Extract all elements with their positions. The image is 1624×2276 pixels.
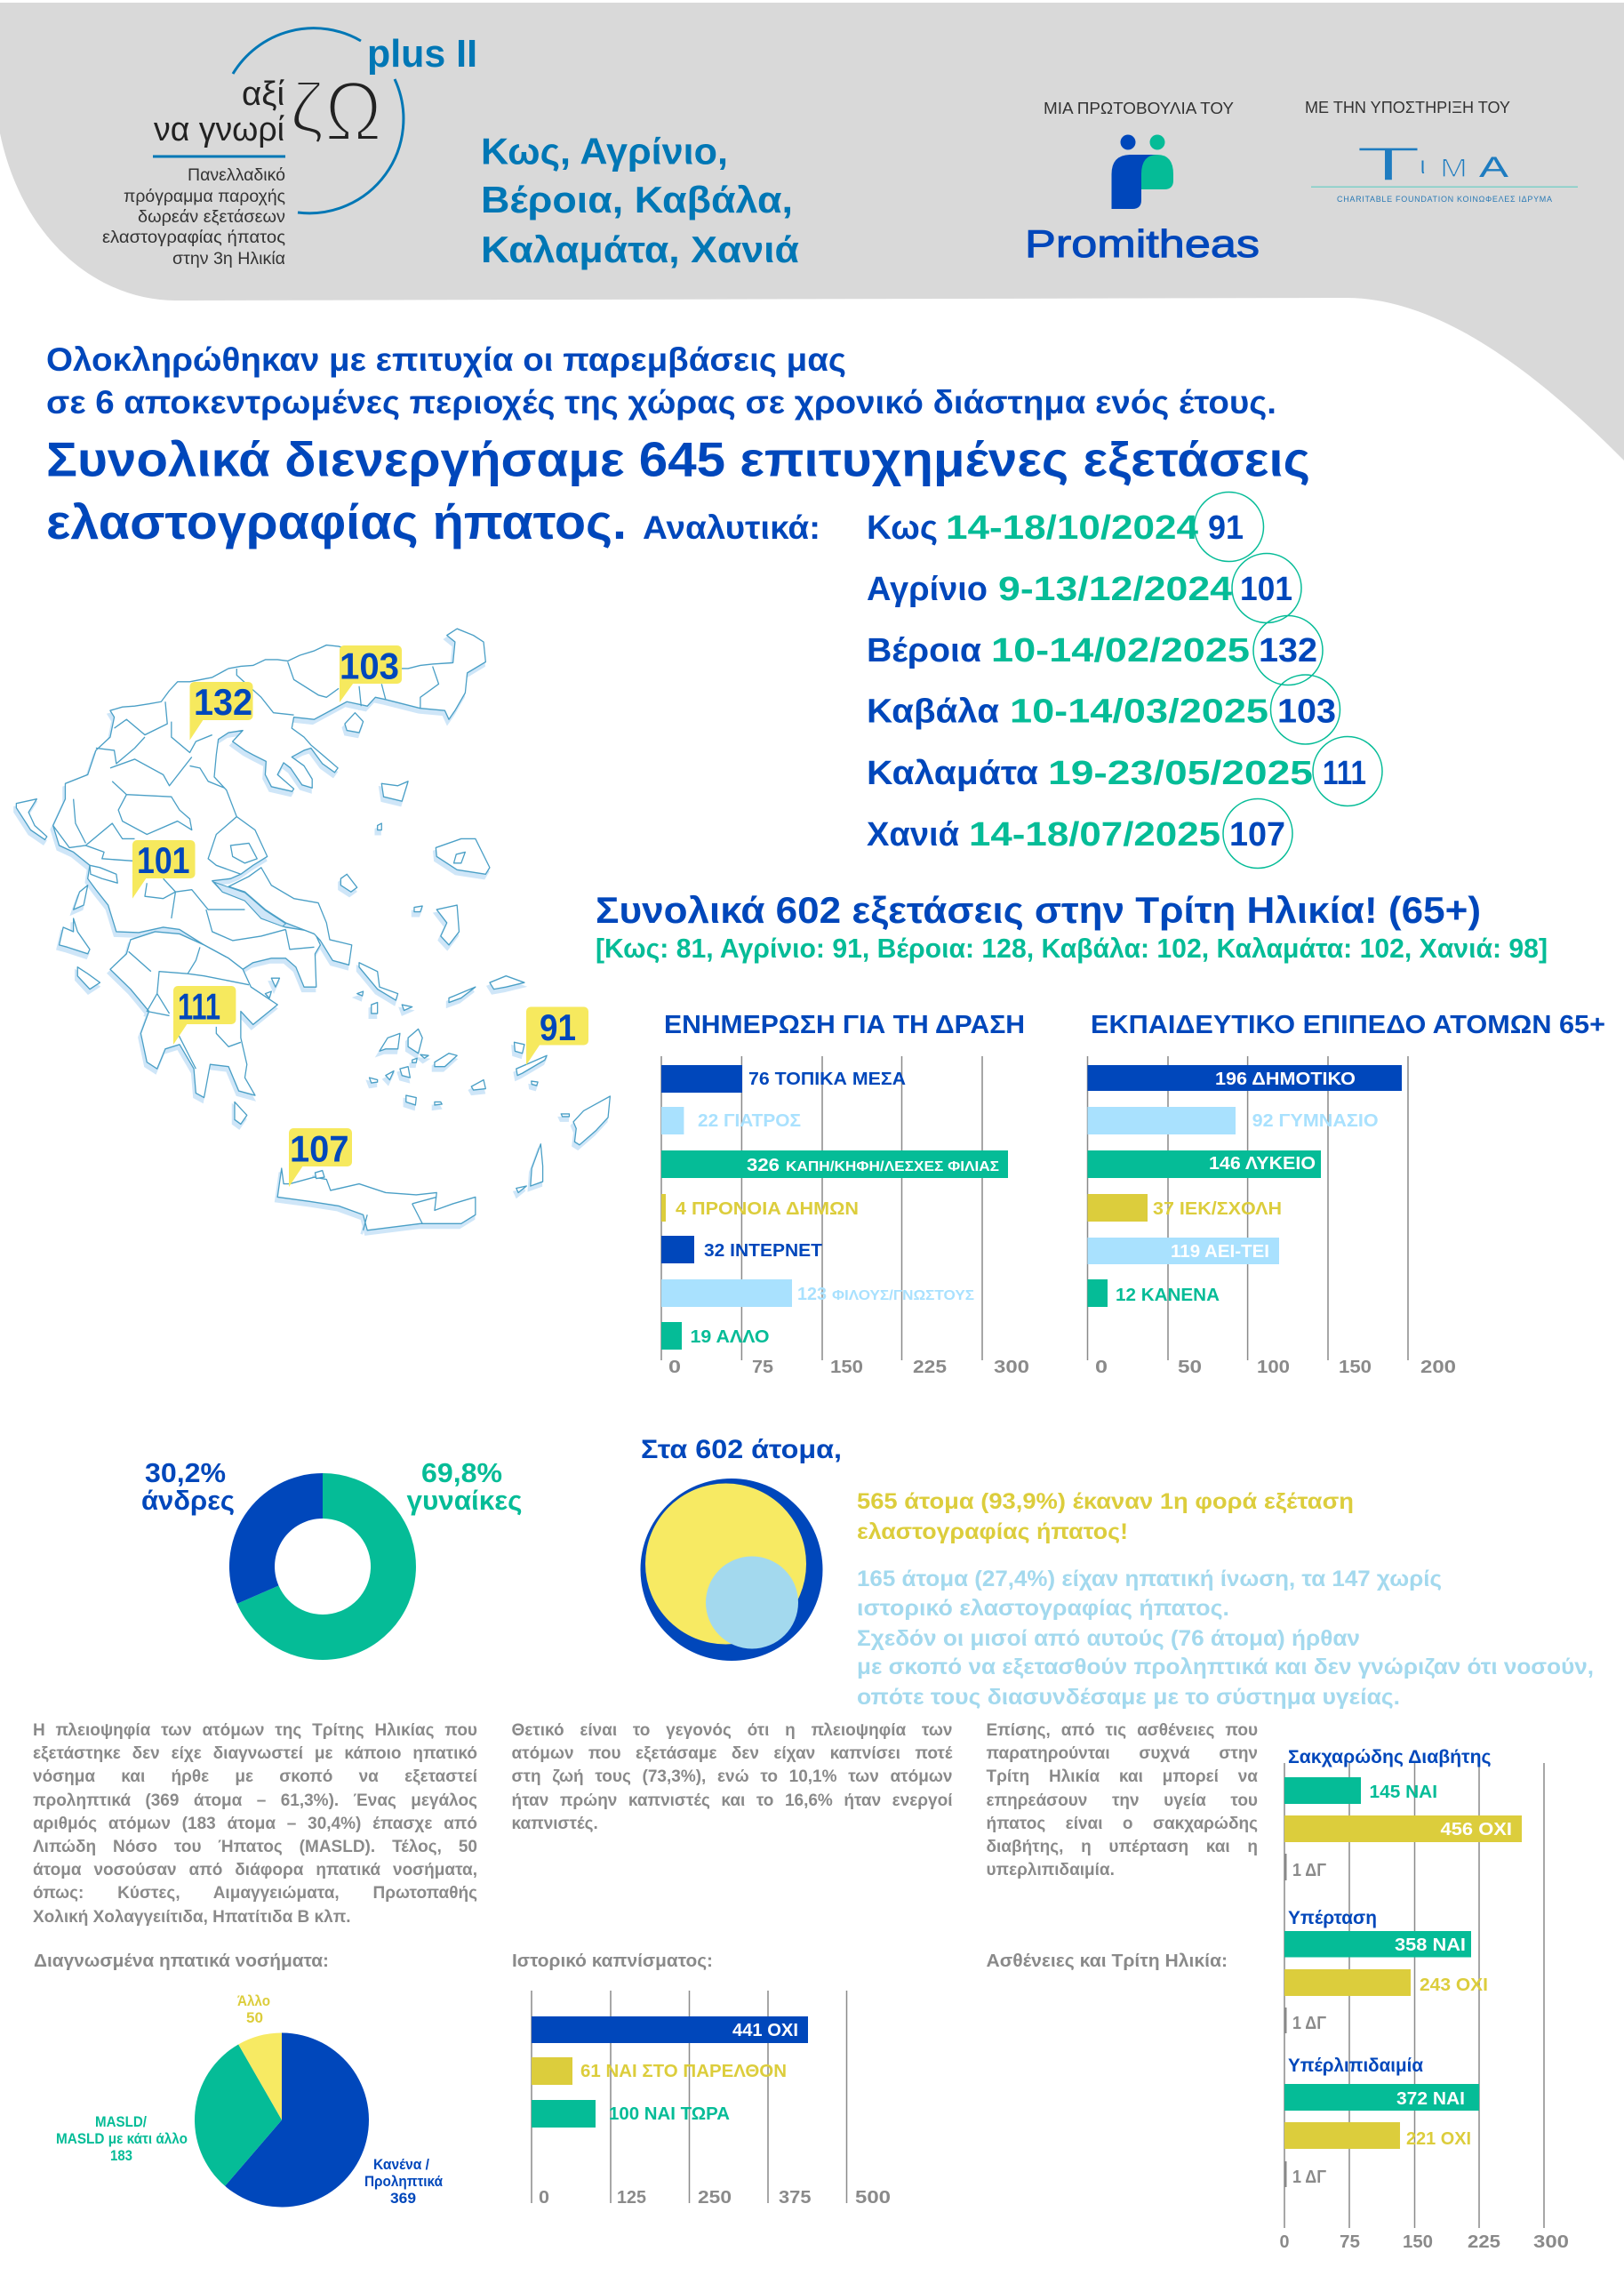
bar chart: awareness of the action: 326 (747, 1156, 780, 1175)
bar chart: education level: 100 (1257, 1358, 1290, 1377)
logo: αξί να γνωρίζω plus II: αξί (242, 76, 285, 113)
donut chart: gender: γυναίκες (407, 1485, 523, 1516)
group: hyperlipidemia: 372 ΝΑΙ (1396, 2089, 1465, 2109)
header cities (481, 130, 799, 270)
intro heading: σε 6 αποκεντρωμένες περιοχές της χώρας σε χρονικό διάστημα ενός έτους. (46, 384, 1276, 421)
main title: Συνολικά διενεργήσαμε 645 επιτυχημένες εξετάσεις (46, 432, 1310, 487)
row: Kalamata: Καλαμάτα (867, 755, 1038, 792)
bar chart: awareness of the action: 300 (994, 1358, 1029, 1377)
bar chart: awareness of the action: 22 ΓΙΑΤΡΟΣ (698, 1111, 801, 1131)
group: hyperlipidemia (1284, 2056, 1479, 2187)
text block: diseases summary: υπερλιπιδαιμία. (987, 1861, 1115, 1879)
row: Kalamata: 19-23/05/2025 (1048, 755, 1313, 792)
nested circles diagram (640, 1479, 823, 1661)
bar chart: smoking history (532, 1991, 891, 2208)
row: Kavala: Καβάλα (867, 693, 999, 731)
bar chart: awareness of the action: 19 ΑΛΛΟ (690, 1327, 770, 1347)
text block: smoking summary: καπνιστές. (512, 1815, 598, 1833)
text block: liver diagnosis summary: Λιπώδη Νόσο του Ήπατος (MASLD). Τέλος, 50 (33, 1838, 477, 1856)
header cities: Καλαμάτα, Χανιά (481, 228, 799, 270)
group: hypertension: 243 ΟΧΙ (1420, 1975, 1488, 1995)
row: Veria: 10-14/02/2025 (991, 632, 1250, 669)
text block: diseases summary: επηρεάσουν την υγεία του (987, 1791, 1258, 1810)
bar chart: smoking history: 100 ΝΑΙ ΤΩΡΑ (609, 2104, 730, 2124)
callout: Agrinio 101: 101 (137, 839, 190, 881)
callout text: first-time exam: ελαστογραφίας ήπατος! (857, 1519, 1128, 1544)
logo: Promitheas (1025, 100, 1260, 266)
text block: liver diagnosis summary: όπως: Κύστες, Αιμαγγειώματα, Πρωτοπαθής (33, 1884, 477, 1903)
row: Kos: Κως (867, 509, 938, 547)
bar chart: smoking history: 375 (779, 2188, 811, 2208)
group: diabetes (1284, 1747, 1522, 1880)
donut chart: gender (141, 1457, 523, 1660)
row: Chania (867, 798, 1292, 868)
row: Agrinio (867, 553, 1301, 622)
pie chart: diagnosed liver diseases: MASLD/ (95, 2113, 147, 2130)
text block: liver diagnosis summary: εξετάστηκε δεν είχε διαγνωστεί με κάποιο ηπατικό (33, 1744, 477, 1763)
bar chart: education level: 119 ΑΕΙ-ΤΕΙ (1171, 1242, 1269, 1262)
map of Greece with callouts (15, 629, 610, 1234)
group: diabetes: Σακχαρώδης Διαβήτης (1288, 1747, 1492, 1767)
row: Veria: 132 (1259, 632, 1317, 669)
bar chart: awareness of the action: 32 ΙΝΤΕΡΝΕΤ (704, 1241, 822, 1261)
callout: Agrinio 101 (132, 839, 196, 899)
donut chart: gender: 30,2% (145, 1457, 226, 1488)
bar chart: education level: 12 ΚΑΝΕΝΑ (1116, 1286, 1220, 1305)
intervention list (867, 493, 1382, 868)
text block: diseases summary: Επίσης, από τις ασθένειες που (987, 1721, 1258, 1740)
sub-heading: breakdown by city: [Κως: 81, Αγρίνιο: 91, Βέροια: 128, Καβάλα: 102, Καλαμάτα: 102, Χανιά: 98] (596, 933, 1548, 964)
group: diabetes: 1 ΔΓ (1292, 1861, 1326, 1880)
text block: liver diagnosis summary (33, 1721, 477, 1927)
bar chart: education level: 50 (1178, 1358, 1202, 1377)
bar chart: awareness of the action: ΚΑΠΗ/ΚΗΦΗ/ΛΕΣΧΕΣ ΦΙΛΙΑΣ (786, 1159, 999, 1174)
logo: TIMA foundation: CHARITABLE FOUNDATION ΚΟΙΝΩΦΕΛΕΣ ΙΔΡΥΜΑ (1337, 195, 1552, 204)
donut chart: gender: άνδρες (141, 1485, 235, 1516)
group: diabetes: 456 ΟΧΙ (1440, 1820, 1512, 1839)
row: Agrinio: 101 (1240, 571, 1292, 608)
bar chart: education level: 92 ΓΥΜΝΑΣΙΟ (1252, 1111, 1379, 1131)
callout: Kavala 103: 103 (340, 645, 399, 686)
text block: liver diagnosis summary: Η πλειοψηφία των ατόμων της Τρίτης Ηλικίας που (33, 1721, 477, 1740)
callout text: first-time exam: 565 άτομα (93,9%) έκαναν 1η φορά εξέταση (857, 1489, 1354, 1514)
bar chart: diseases and third age: 225 (1468, 2232, 1500, 2252)
text block: diseases summary: διαβήτης, η υπέρταση και η (987, 1838, 1258, 1856)
group: hypertension: 358 ΝΑΙ (1395, 1935, 1466, 1955)
header cities: Κως, Αγρίνιο, (481, 130, 728, 172)
text block: liver diagnosis summary: άτομα νοσούσαν από διάφορα ηπατικά νοσήματα, (33, 1861, 477, 1879)
bar chart: awareness of the action: 4 ΠΡΟΝΟΙΑ ΔΗΜΩΝ (676, 1199, 859, 1219)
pie chart: diagnosed liver diseases: Άλλο (237, 1992, 270, 2009)
bar chart: education level (1088, 1011, 1605, 1377)
logo: αξί να γνωρίζω plus II (102, 28, 477, 268)
callout: Kos 91 (526, 1006, 588, 1065)
callout text: fibrosis (857, 1567, 1594, 1710)
bar chart: education level: 146 ΛΥΚΕΙΟ (1209, 1154, 1316, 1174)
group: hypertension: 1 ΔΓ (1292, 2014, 1326, 2033)
text block: smoking summary: ήταν πρώην καπνιστές και το 16,6% ήταν ενεργοί (512, 1791, 953, 1810)
logo: αξί να γνωρίζω plus II: να γνωρί (154, 111, 285, 148)
bar chart: diseases and third age (1280, 1747, 1569, 2252)
group: hyperlipidemia: 1 ΔΓ (1292, 2168, 1326, 2187)
bar chart: awareness of the action: 225 (913, 1358, 947, 1377)
pie chart: diagnosed liver diseases: 183 (110, 2147, 132, 2164)
heading: 602 exams in third age: Συνολικά 602 εξετάσεις στην Τρίτη Ηλικία! (65+) (596, 889, 1481, 931)
bar chart: smoking history: 250 (698, 2188, 732, 2208)
row: Kos (867, 493, 1264, 562)
header cities: Βέροια, Καβάλα, (481, 179, 793, 220)
bar chart: smoking history: 125 (617, 2188, 646, 2208)
bar chart: smoking history: 441 ΟΧΙ (732, 2021, 798, 2040)
logo: TIMA foundation: Μ (1440, 154, 1468, 183)
callout: Chania 107: 107 (290, 1128, 348, 1170)
logo: TIMA foundation: Τ (1356, 138, 1421, 191)
logo: Promitheas: ΜΙΑ ΠΡΩΤΟΒΟΥΛΙΑ ΤΟΥ (1044, 100, 1234, 117)
logo: αξί να γνωρίζω plus II: πρόγραμμα παροχής (124, 188, 285, 206)
text block: liver diagnosis summary: νόσημα και ήρθε με σκοπό να εξεταστεί (33, 1767, 477, 1786)
main title: Αναλυτικά: (643, 509, 820, 546)
group: hypertension (1284, 1908, 1488, 2033)
logo: TIMA foundation: ΜΕ ΤΗΝ ΥΠΟΣΤΗΡΙΞΗ ΤΟΥ (1305, 99, 1510, 116)
text block: liver diagnosis summary: προληπτικά (369 άτομα – 61,3%). Ένας μεγάλος (33, 1791, 477, 1810)
chart heading: ΕΚΠΑΙΔΕΥΤΙΚΟ ΕΠΙΠΕΔΟ ΑΤΟΜΩΝ 65+ (1091, 1011, 1605, 1039)
callout text: fibrosis: με σκοπό να εξετασθούν προληπτικά και δεν γνώριζαν ότι νοσούν, (857, 1655, 1594, 1679)
logo: TIMA foundation: Α (1479, 151, 1509, 183)
pie chart: diagnosed liver diseases: 50 (246, 2009, 263, 2026)
intro heading: Ολοκληρώθηκαν με επιτυχία οι παρεμβάσεις μας (46, 341, 846, 378)
bar chart: diseases and third age: 75 (1340, 2232, 1360, 2252)
callout: Kalamata 111: 111 (178, 985, 220, 1028)
row: Veria: Βέροια (867, 632, 981, 669)
heading: in the 602 people: Στα 602 άτομα, (641, 1435, 842, 1464)
text block: liver diagnosis summary: αριθμός ατόμων (183 άτομα – 30,4%) έπασχε από (33, 1815, 477, 1833)
text block: smoking summary: ατόμων που εξετάσαμε δεν είχαν καπνίσει ποτέ (512, 1744, 953, 1763)
text block: diseases summary (987, 1721, 1258, 1879)
row: Kalamata: 111 (1323, 755, 1366, 792)
text block: smoking summary (512, 1721, 953, 1833)
row: Kavala: 10-14/03/2025 (1010, 693, 1268, 731)
row: Chania: 14-18/07/2025 (969, 816, 1220, 854)
logo: TIMA foundation (1305, 99, 1578, 204)
intro heading (46, 341, 1276, 421)
group: diabetes: 145 ΝΑΙ (1369, 1783, 1437, 1802)
callout text: fibrosis: 165 άτομα (27,4%) είχαν ηπατική ίνωση, τα 147 χωρίς (857, 1567, 1442, 1591)
bar chart: education level: 200 (1420, 1358, 1456, 1377)
text block: smoking summary: Θετικό είναι το γεγονός ότι η πλειοψηφία των (512, 1721, 953, 1740)
row: Kos: 91 (1208, 509, 1244, 547)
label: smoking history: Ιστορικό καπνίσματος: (512, 1951, 713, 1971)
logo: αξί να γνωρίζω plus II: δωρεάν εξετάσεων (138, 208, 285, 227)
pie chart: diagnosed liver diseases: MASLD με κάτι άλλο (56, 2130, 188, 2147)
pie chart: diagnosed liver diseases: Κανένα / (373, 2156, 429, 2173)
bar chart: smoking history: 0 (539, 2188, 549, 2208)
row: Kos: 14-18/10/2024 (946, 509, 1198, 547)
bar chart: awareness of the action: 0 (668, 1358, 681, 1377)
text block: diseases summary: ήπατος είναι ο σακχαρώδης (987, 1815, 1258, 1833)
callout: Kos 91: 91 (540, 1006, 576, 1048)
row: Veria (867, 615, 1323, 685)
row: Kavala (867, 675, 1340, 744)
map outline (15, 629, 610, 1234)
row: Kavala: 103 (1277, 693, 1336, 731)
bar chart: awareness of the action: 150 (830, 1358, 863, 1377)
logo: αξί να γνωρίζω plus II: ζ (290, 68, 324, 147)
callout: Veria 132: 132 (194, 681, 252, 723)
bar chart: education level: 150 (1339, 1358, 1372, 1377)
bar chart: awareness of the action: 75 (752, 1358, 773, 1377)
bar chart: education level: 37 ΙΕΚ/ΣΧΟΛΗ (1153, 1199, 1282, 1219)
logo: αξί να γνωρίζω plus II: Ω (324, 64, 382, 159)
bar chart: awareness of the action (661, 1011, 1029, 1377)
bar chart: awareness of the action: ΦΙΛΟΥΣ/ΓΝΩΣΤΟΥΣ (832, 1288, 974, 1303)
pie chart: diagnosed liver diseases: Προληπτικά (364, 2173, 443, 2190)
logo: αξί να γνωρίζω plus II: ελαστογραφίας ήπατος (102, 228, 285, 247)
callout text: fibrosis: Σχεδόν οι μισοί από αυτούς (76 άτομα) ήρθαν (857, 1626, 1360, 1651)
logo: Promitheas: Promitheas (1025, 222, 1260, 266)
bar chart: smoking history: 61 ΝΑΙ ΣΤΟ ΠΑΡΕΛΘΟΝ (580, 2062, 787, 2081)
main title (46, 432, 1310, 549)
text block: diseases summary: παρατηρούνται συχνά στην (987, 1744, 1258, 1763)
logo: αξί να γνωρίζω plus II: Πανελλαδικό (188, 166, 285, 185)
bar chart: smoking history: 500 (855, 2188, 891, 2208)
pie chart: diagnosed liver diseases: 369 (390, 2190, 416, 2207)
bar chart: awareness of the action: 76 ΤΟΠΙΚΑ ΜΕΣΑ (748, 1070, 906, 1089)
bar chart: diseases and third age: 300 (1533, 2232, 1569, 2252)
text block: smoking summary: στη ζωή τους (73,3%), ενώ το 10,1% των ατόμων (512, 1767, 953, 1786)
logo: TIMA foundation: ι (1420, 151, 1425, 179)
bar chart: education level: 196 ΔΗΜΟΤΙΚΟ (1215, 1070, 1356, 1089)
callout text: fibrosis: ιστορικό ελαστογραφίας ήπατος. (857, 1596, 1229, 1621)
callout: Kalamata 111 (173, 985, 236, 1045)
callout text: fibrosis: οπότε τους διασυνδέσαμε με το σύστημα υγείας. (857, 1685, 1400, 1710)
text block: liver diagnosis summary: Χολική Χολαγγειίτιδα, Ηπατίτιδα Β κλπ. (33, 1908, 351, 1927)
text block: diseases summary: Τρίτη Ηλικία και μπορεί να (987, 1767, 1258, 1786)
pie chart: diagnosed liver diseases (56, 1992, 443, 2208)
row: Kalamata (867, 736, 1382, 805)
group: hyperlipidemia: Υπέρλιπιδαιμία (1288, 2056, 1423, 2076)
group: hyperlipidemia: 221 ΟΧΙ (1406, 2129, 1471, 2149)
label: diseases and third age: Ασθένειες και Τρίτη Ηλικία: (987, 1951, 1228, 1971)
callout: Chania 107 (289, 1128, 352, 1187)
logo: αξί να γνωρίζω plus II: plus II (367, 32, 477, 76)
header background panel (0, 3, 1624, 461)
row: Chania: Χανιά (867, 816, 959, 854)
row: Chania: 107 (1229, 816, 1285, 854)
bar chart: awareness of the action: 123 (797, 1285, 827, 1304)
donut chart: gender: 69,8% (421, 1457, 502, 1488)
bar chart: diseases and third age: 150 (1403, 2232, 1433, 2252)
chart heading: ΕΝΗΜΕΡΩΣΗ ΓΙΑ ΤΗ ΔΡΑΣΗ (664, 1011, 1025, 1039)
logo: αξί να γνωρίζω plus II: στην 3η Ηλικία (172, 250, 285, 268)
main title: ελαστογραφίας ήπατος. (46, 494, 627, 549)
callout text: first-time exam (857, 1489, 1354, 1544)
row: Agrinio: Αγρίνιο (867, 571, 988, 608)
row: Agrinio: 9-13/12/2024 (998, 571, 1232, 608)
callout: Veria 132 (190, 681, 252, 740)
group: hypertension: Υπέρταση (1288, 1908, 1377, 1928)
bar chart: diseases and third age: 0 (1280, 2232, 1289, 2252)
bar chart: education level: 0 (1095, 1358, 1108, 1377)
label: diagnosed liver diseases: Διαγνωσμένα ηπατικά νοσήματα: (34, 1951, 329, 1971)
